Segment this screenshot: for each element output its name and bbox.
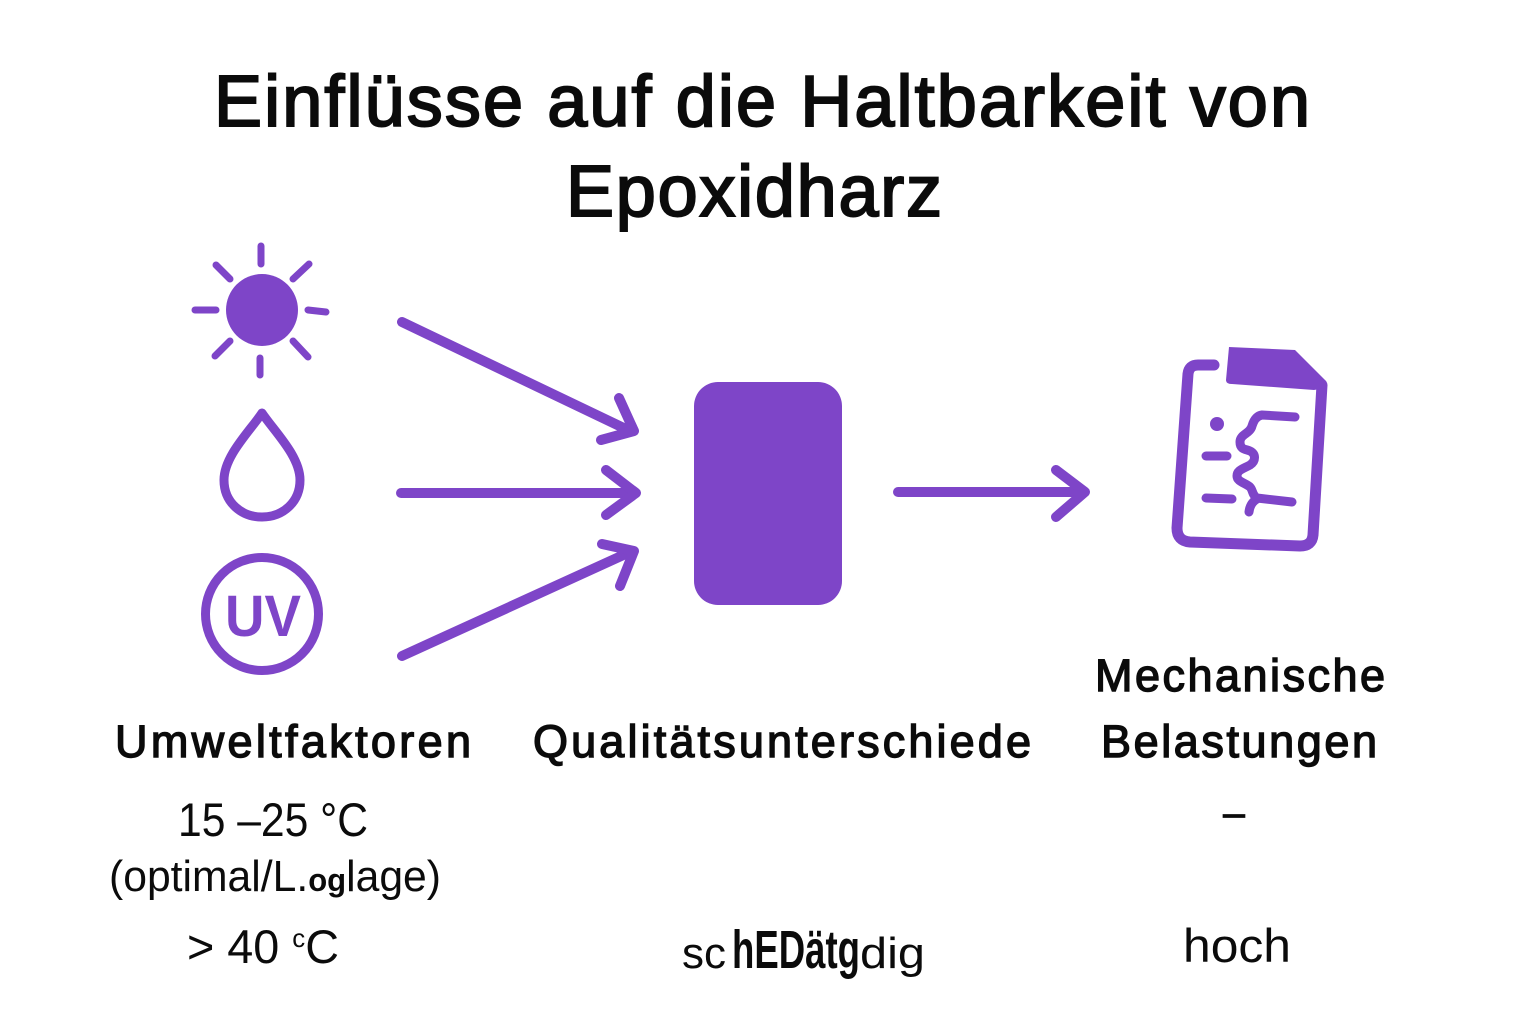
arrow: drop to resin (401, 470, 636, 515)
mechanical load dash: – (1223, 788, 1245, 837)
temperature: optimal range (109, 793, 441, 901)
column heading: Mechanische Belastungen: Belastungen (1101, 716, 1377, 767)
resin block (694, 382, 842, 605)
temperature: high: > 40 (187, 920, 280, 973)
title (214, 62, 1310, 232)
temperature: high: c (292, 923, 305, 953)
title: Epoxidharz (566, 152, 942, 232)
column heading: Umweltfaktoren: Umweltfaktoren (115, 716, 471, 767)
temperature: optimal range: (optimal/L.oglage) (109, 852, 441, 901)
temperature: high: C (305, 920, 339, 973)
arrow: UV to resin (402, 544, 634, 656)
mechanical load value: hoch (1183, 919, 1291, 972)
title: Einflüsse auf die Haltbarkeit von (214, 62, 1310, 142)
column heading: Qualitätsunterschiede: Qualitätsunterschiede (533, 716, 1031, 767)
arrow: resin to loads (898, 470, 1085, 517)
garbled quality label: sc (682, 929, 726, 978)
icon: UV circle: UV (225, 584, 301, 649)
arrow: sun to resin (402, 322, 634, 440)
icon: UV circle (206, 558, 318, 670)
garbled quality label: hEDätg (732, 920, 860, 980)
icon: sun (195, 246, 326, 375)
temperature: optimal range: 15 –25 °C (178, 793, 368, 846)
icon: document with crack (1177, 347, 1327, 546)
icon: water drop (224, 413, 300, 517)
garbled quality label: dig (860, 929, 925, 978)
column heading: Mechanische Belastungen: Mechanische (1095, 650, 1385, 701)
column heading: Mechanische Belastungen (1095, 650, 1385, 767)
